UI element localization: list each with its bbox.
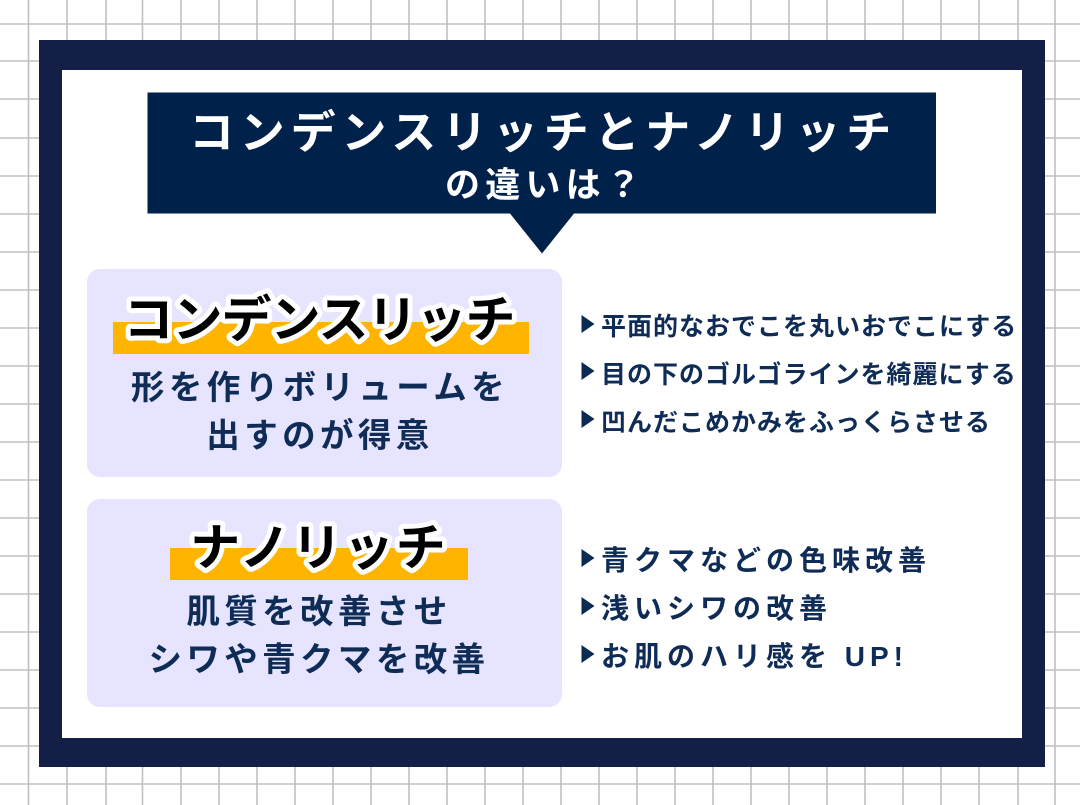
list item 1: 青クマなどの色味改善 <box>601 545 931 576</box>
panel background <box>87 269 562 477</box>
yellow highlight bar <box>170 548 468 580</box>
list: condense rich benefits <box>582 313 1017 437</box>
list item 3: 凹んだこめかみをふっくらさせる <box>601 409 991 437</box>
title banner <box>148 92 936 254</box>
icon: triangle bullet <box>582 315 594 333</box>
title line 1: コンデンスリッチとナノリッチ <box>189 107 897 158</box>
list item 3: お肌のハリ感を UP! <box>601 641 908 672</box>
icon: triangle bullet <box>582 410 594 428</box>
list item 2: 浅いシワの改善 <box>601 593 832 624</box>
panel: white content area <box>62 70 1022 738</box>
list: nano rich benefits <box>582 545 931 672</box>
icon: triangle bullet <box>582 362 594 380</box>
panel: condense rich <box>87 269 562 477</box>
list item 1: 平面的なおでこを丸いおでこにする <box>601 313 1017 341</box>
list item 2: 目の下のゴルゴラインを綺麗にする <box>601 360 1017 389</box>
title line 2: の違いは？ <box>445 166 646 205</box>
icon: triangle bullet <box>582 597 594 615</box>
icon: triangle bullet <box>582 549 594 567</box>
panel: nano rich <box>87 499 562 707</box>
yellow highlight bar <box>113 322 529 354</box>
description <box>131 370 509 455</box>
heading: nano rich: ナノリッチ <box>190 520 448 576</box>
icon: triangle bullet <box>582 645 594 663</box>
panel background <box>87 499 562 707</box>
description: 出すのが得意 <box>206 417 434 455</box>
description: シワや青クマを改善 <box>148 642 490 679</box>
banner callout shape with pointer <box>148 92 936 254</box>
description: 形を作りボリュームを <box>131 370 509 407</box>
description: 肌質を改善させ <box>186 594 452 631</box>
description <box>148 594 490 679</box>
heading: condense rich: コンデンスリッチ <box>124 292 514 348</box>
